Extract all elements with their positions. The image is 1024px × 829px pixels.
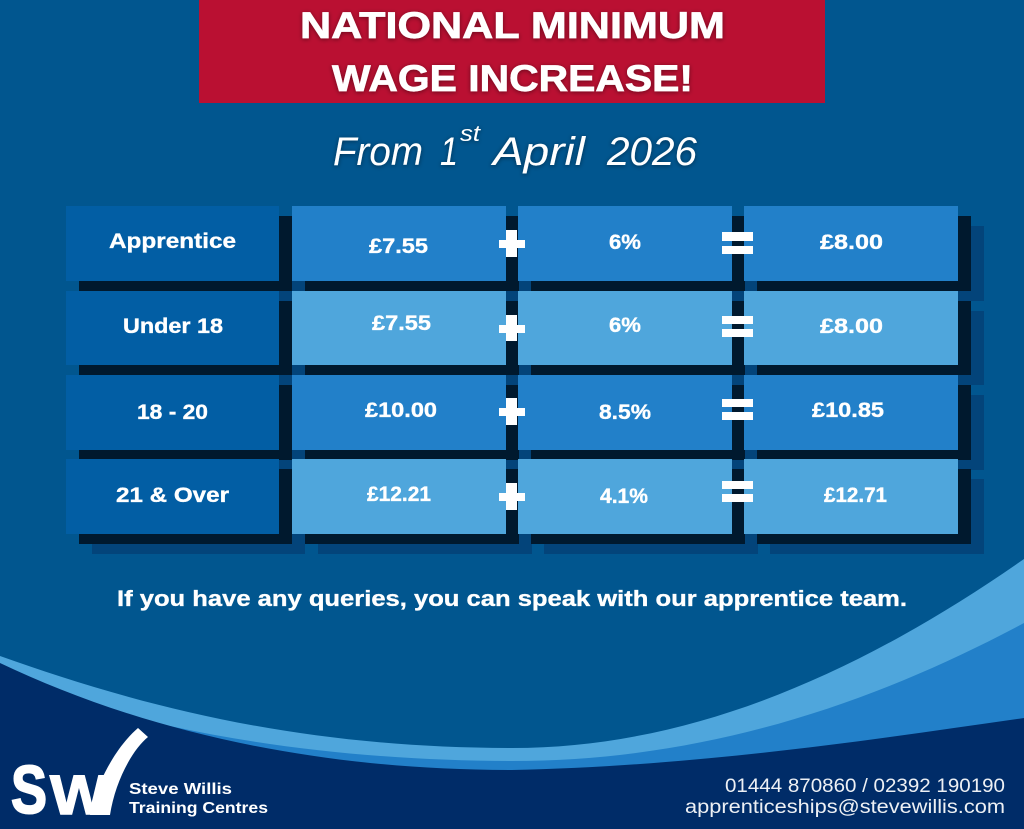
row: Under 18 [66,291,958,365]
contact details: 01444 870860 / 02392 190190 [725,776,1005,797]
row: 21 & Over: 4.1% [600,485,648,508]
row: 21 & Over: £12.21 [367,483,431,506]
row: Under 18: Under 18 [123,315,223,338]
row: 21 & Over: £12.71 [824,484,887,507]
logo: Steve Willis Training Centres [11,728,268,828]
row: 18 - 20: £10.85 [812,399,884,422]
row: 18 - 20: 18 - 20 [137,401,208,424]
row: Apprentice [66,206,958,281]
title banner [199,0,825,103]
wave: navy footer band [0,663,1024,829]
title text: WAGE INCREASE! [332,58,693,99]
row: Under 18: £7.55 [372,312,431,335]
row: 18 - 20 [66,375,958,450]
row: Under 18: 6% [609,314,641,337]
row: Apprentice: 6% [609,231,641,254]
subtitle: date: 2026 [606,130,698,174]
subtitle: date: 1 [440,130,458,174]
outer table shadows [92,226,984,554]
logo tick [90,728,148,815]
wave: mid blue swoosh [170,623,1024,829]
inner table shadows [79,216,971,544]
wage table [66,206,984,554]
row: 21 & Over: 21 & Over [116,484,229,507]
row: Apprentice: £7.55 [369,235,428,258]
query note: If you have any queries, you can speak with our apprentice team. [117,586,907,611]
wave: light blue swoosh [0,559,1024,829]
title text: NATIONAL MINIMUM [300,5,725,46]
logo: Steve Willis Training Centres: Training Centres [129,800,268,817]
row: 18 - 20: £10.00 [365,399,437,422]
subtitle: date [333,121,698,174]
contact details [685,776,1005,818]
subtitle: date: April [491,130,586,174]
subtitle: date: From [333,130,423,174]
logo name: Steve Willis [129,781,232,798]
row: Under 18: £8.00 [820,315,883,338]
row: Apprentice: Apprentice [109,230,236,253]
contact details: apprenticeships@stevewillis.com [685,797,1005,818]
logo letter W: W [50,763,108,826]
row: 18 - 20: 8.5% [599,401,651,424]
title text [300,5,725,99]
row: Apprentice: £8.00 [820,231,883,254]
logo letter S: S [11,752,47,828]
row: 21 & Over [66,459,958,534]
subtitle: date: st [460,121,481,146]
